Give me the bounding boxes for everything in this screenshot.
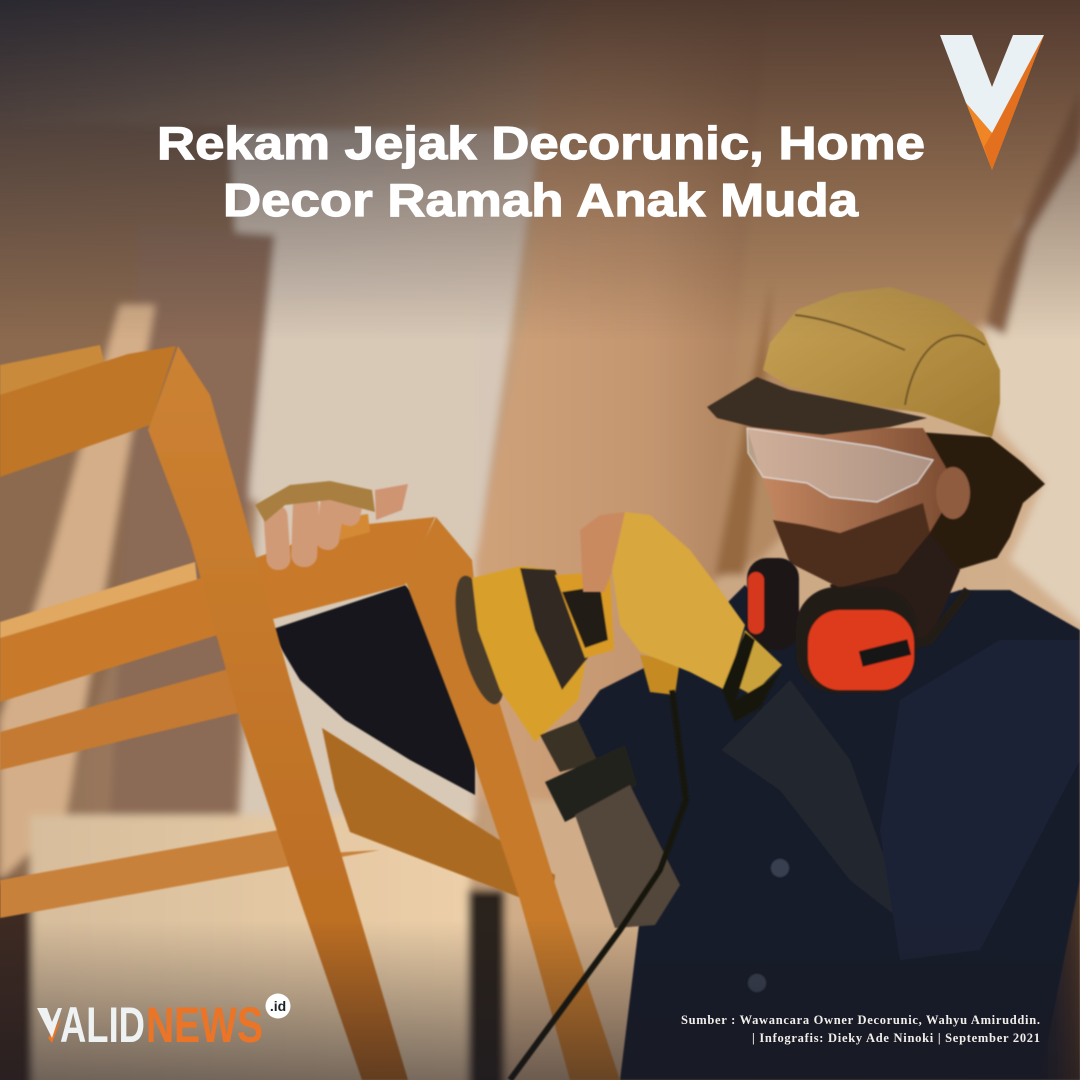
safety glasses [747, 428, 933, 502]
left hand on chair [255, 481, 408, 571]
logo badge: .id [266, 994, 290, 1018]
chair: orange wooden frame [0, 345, 620, 1080]
logo badge: .id: .id [270, 998, 286, 1014]
button [748, 974, 766, 992]
man: navy work jacket and far sleeve [270, 520, 1080, 1080]
title: Decor Ramah Anak Muda [223, 174, 858, 226]
source credit: Sumber : Wawancara Owner Decorunic, Wahyu Amiruddin. [681, 1013, 1040, 1027]
hair [890, 430, 1045, 570]
cap seams [795, 315, 985, 405]
jacket shoulder highlight [880, 640, 1080, 960]
man: head [707, 287, 1045, 588]
fingers [263, 486, 366, 571]
thumb [375, 484, 408, 520]
title: Rekam Jejak Decorunic, Home [157, 117, 925, 169]
title [157, 117, 925, 226]
logo V mark [37, 1008, 62, 1043]
fingerless glove top [255, 481, 375, 522]
source credit [681, 1013, 1040, 1045]
ear [936, 467, 970, 519]
power cord [510, 690, 686, 1080]
far sleeve behind chair [270, 585, 475, 795]
wall corner lower right [1040, 880, 1080, 1080]
jacket body [570, 585, 1080, 1080]
source credit: | Infografis: Dieky Ade Ninoki | September 2021 [752, 1031, 1040, 1045]
button [771, 859, 789, 877]
neck [830, 520, 960, 640]
cap brim [707, 377, 927, 435]
logo: ValidNews.id [37, 994, 290, 1053]
logo word: NEWS: NEWS [146, 997, 263, 1053]
icon: V brand mark [940, 35, 1044, 170]
face [747, 428, 957, 587]
logo word: ALID: ALID [60, 997, 145, 1053]
cap crown [763, 287, 1000, 437]
near sleeve fold [722, 680, 895, 915]
hand with yellow glove on sander [580, 512, 782, 722]
ear defenders [747, 558, 968, 693]
sander tool [446, 566, 686, 1080]
dust canister [540, 720, 598, 772]
beard [773, 503, 930, 588]
